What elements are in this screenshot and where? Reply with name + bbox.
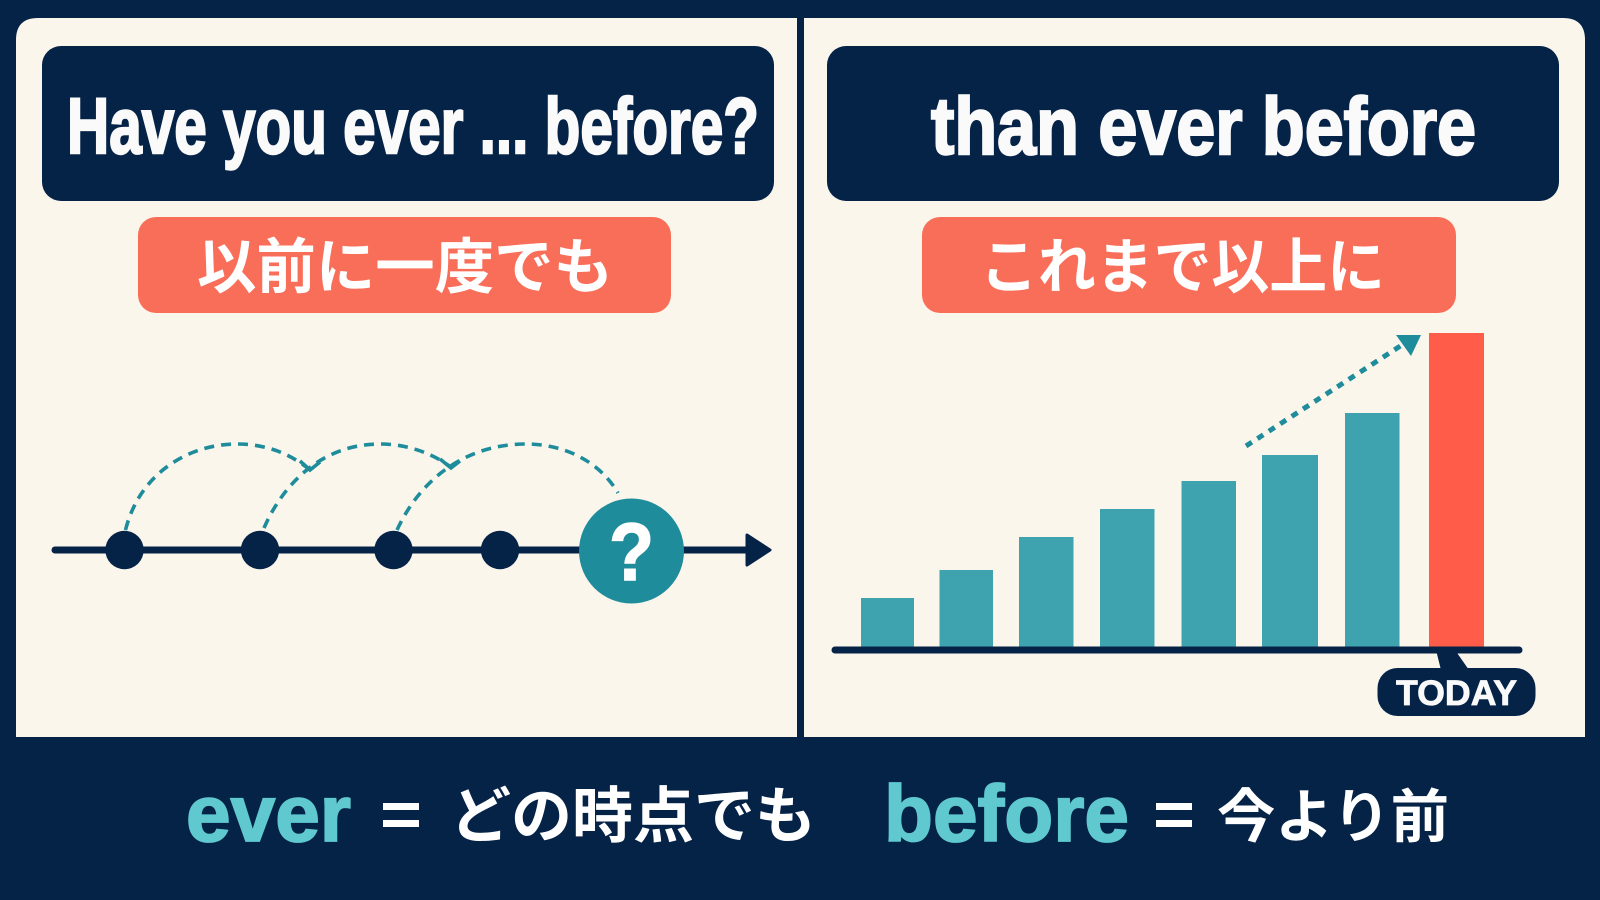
timeline diagram	[55, 444, 770, 604]
bar chart	[835, 333, 1536, 716]
subheading left	[138, 217, 671, 313]
timeline axis	[55, 546, 750, 554]
timeline dots	[105, 531, 519, 569]
today label: TODAY	[1396, 674, 1517, 713]
baseline	[835, 646, 1519, 654]
panel background left	[16, 18, 797, 737]
word: before: before	[884, 769, 1129, 858]
panel background right	[804, 18, 1585, 737]
subheading right: これまで以上に	[980, 234, 1385, 301]
equals sign right	[1156, 803, 1192, 827]
today label	[1378, 650, 1536, 716]
icon: timeline arrowhead	[747, 535, 770, 565]
today bar	[1429, 333, 1484, 649]
panel: than ever before	[804, 18, 1585, 737]
heading box left	[42, 46, 774, 201]
word: ever: ever	[186, 769, 351, 858]
heading box left: Have you ever ... before?	[67, 81, 759, 170]
teal bars	[861, 413, 1400, 649]
heading box right: than ever before	[931, 82, 1476, 172]
dashed jump arcs	[126, 444, 618, 530]
icon: question mark circle: ?	[609, 507, 654, 598]
heading box right	[827, 46, 1559, 201]
subheading right	[922, 217, 1456, 313]
summary line	[186, 769, 1449, 858]
definition of before: 今より前	[1217, 785, 1449, 850]
definition of ever: どの時点でも	[450, 782, 816, 850]
panel: Have you ever before	[16, 18, 797, 737]
icon: question mark circle	[579, 498, 684, 604]
arc arrow barbs	[300, 459, 460, 470]
equals sign left	[383, 803, 419, 827]
subheading left: 以前に一度でも	[197, 234, 613, 301]
dashed trend arrow	[1246, 335, 1421, 446]
